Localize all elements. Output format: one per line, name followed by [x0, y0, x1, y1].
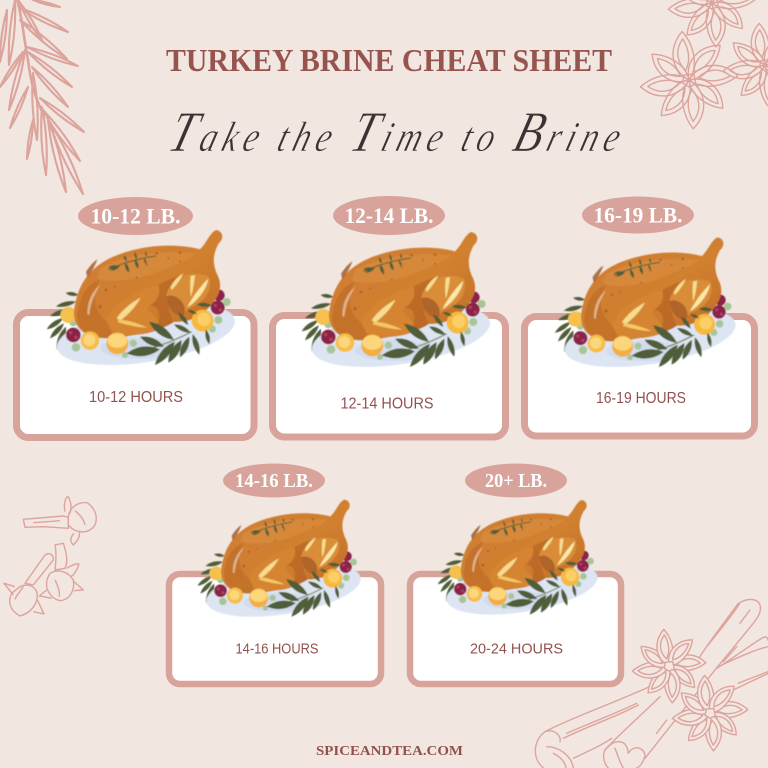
card	[272, 316, 506, 437]
brine time: 20-24 HOURS	[470, 642, 563, 658]
panel: 12-14 lb	[272, 196, 506, 437]
subtitle script: Take the Time to Brine	[162, 99, 631, 164]
weight label	[582, 196, 694, 234]
decoration: cinnamon sticks and star anise bottom right	[535, 599, 768, 768]
card	[410, 574, 621, 684]
brine time: 10-12 HOURS	[89, 389, 183, 406]
weight label: 12-14 LB.	[344, 203, 434, 228]
panel: 14-16 lb	[169, 464, 381, 684]
turkey illustration	[554, 237, 740, 377]
weight label: 14-16 LB.	[235, 471, 313, 492]
decoration: rosemary sprig top left	[0, 0, 86, 195]
card	[16, 312, 254, 438]
weight label: 16-19 LB.	[594, 202, 682, 228]
panel: 16-19 lb	[524, 196, 754, 436]
weight label	[223, 464, 325, 498]
panel: 20+ lb	[410, 464, 621, 684]
footer website: SPICEANDTEA.COM	[316, 744, 463, 759]
weight label	[333, 196, 445, 235]
decoration: cloves left	[4, 497, 96, 616]
weight label	[78, 197, 193, 235]
brine time: 12-14 HOURS	[340, 396, 434, 412]
weight label: 10-12 LB.	[90, 204, 180, 228]
turkey illustration	[45, 230, 239, 376]
title: TURKEY BRINE CHEAT SHEET	[166, 43, 612, 78]
decoration: star anise top right	[639, 0, 768, 130]
card	[524, 316, 754, 436]
turkey illustration	[300, 232, 494, 378]
weight label: 20+ LB.	[485, 471, 547, 492]
brine time: 16-19 HOURS	[596, 390, 686, 407]
turkey illustration	[196, 500, 364, 626]
card	[169, 574, 381, 684]
panel: 10-12 lb	[16, 197, 254, 438]
turkey illustration	[436, 500, 601, 624]
weight label	[465, 464, 567, 498]
brine time: 14-16 HOURS	[236, 642, 318, 658]
